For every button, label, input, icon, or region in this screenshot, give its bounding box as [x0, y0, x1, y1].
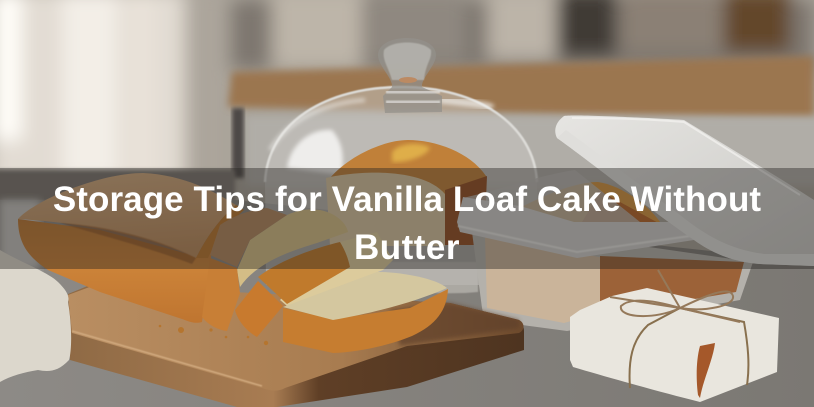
linen towel: [0, 250, 71, 382]
slice 1: [202, 208, 348, 331]
title line 1: Storage Tips for Vanilla Loaf Cake Without: [53, 180, 761, 219]
slice 1 front crust: [202, 258, 240, 331]
title banner: [0, 168, 814, 269]
cake under dome: [326, 140, 487, 246]
table surface: [0, 200, 814, 407]
lower cabinets: [246, 116, 814, 186]
wrapped parcel with twine: [570, 270, 779, 402]
wooden shelf: [228, 56, 814, 120]
left wall below curtain: [0, 170, 235, 202]
glass cloche dome: [265, 38, 537, 285]
crumbs: [159, 325, 268, 345]
cake stand plate: [318, 262, 478, 293]
plastic container: [457, 170, 753, 331]
slice 2 crumb: [280, 232, 393, 306]
slice 2: [235, 232, 393, 337]
main loaf: [18, 173, 244, 323]
slice 3: [283, 272, 448, 353]
cloche knob: [378, 38, 442, 113]
slice 1 crumb: [237, 210, 348, 287]
container lid: [555, 115, 814, 266]
slice 1 top crust: [210, 208, 287, 267]
slice 2 top crust: [258, 242, 350, 304]
title line 2: Butter: [354, 228, 460, 267]
slice 2 end crust: [235, 281, 283, 337]
wooden board: [68, 285, 524, 407]
